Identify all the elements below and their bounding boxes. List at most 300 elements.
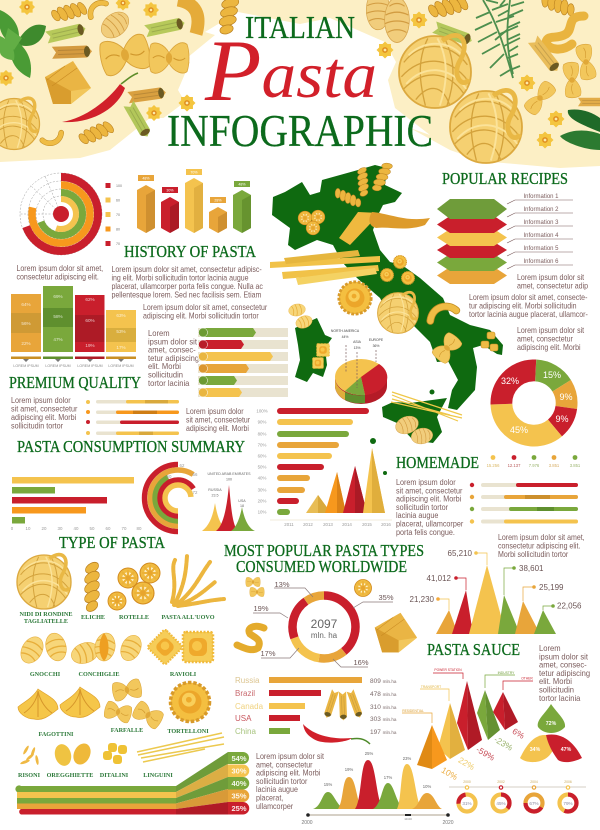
text: premium paragraph <box>11 396 78 431</box>
donut chart: 45% <box>510 425 528 435</box>
progress bars: premium <box>86 400 179 435</box>
text: second paragraph <box>143 303 268 321</box>
text: pasta sauce paragraph: elit. Morbi <box>539 677 572 686</box>
3D pyramid chart: 6% <box>511 726 527 741</box>
timeline with donuts <box>449 780 586 815</box>
bell area chart: 10% <box>423 784 431 789</box>
text: mountain chart note: consectetur adipiscing elit. <box>498 541 580 551</box>
text: recipes note <box>517 273 588 291</box>
ring chart: 2097 mln. ha: 19% <box>253 604 269 613</box>
bar and triangle chart: yearly: 40% <box>258 476 266 480</box>
timeline with donuts: 2006 <box>564 780 572 784</box>
bar and triangle chart: yearly: 100% <box>256 408 268 414</box>
orecchiette: OREGGHIETTE <box>47 772 93 779</box>
petal chart: 47% <box>561 747 572 753</box>
bar and triangle chart: yearly: 70% <box>258 442 266 448</box>
text: premium side note: sit amet, consectetur <box>186 415 251 425</box>
pasta all'uovo <box>161 556 224 621</box>
radial chart legend: 80 <box>116 228 120 232</box>
bell area chart: 17% <box>384 775 392 780</box>
ditalini <box>100 743 129 779</box>
text: donut note <box>517 326 585 352</box>
text: radial note: consectetur adipiscing elit. <box>16 272 99 282</box>
text: recipes note: amet, consectetur adip <box>517 281 588 291</box>
stacked column chart: 63% <box>116 313 126 318</box>
horizontal bars <box>277 408 369 515</box>
stacked column chart: 62% <box>85 297 95 302</box>
donut chart: 32% <box>501 376 519 386</box>
stacked column chart: LOREM IPSUM <box>108 364 134 368</box>
text: premium paragraph: Lorem ipsum dolor <box>11 396 71 405</box>
stacked column chart: 58% <box>53 314 63 319</box>
icon: mint leaves <box>0 10 46 78</box>
conchiglie <box>68 631 145 678</box>
horizontal bar chart: consumption: 70 <box>122 526 127 531</box>
text: homemade paragraph: placerat, ullamcorper <box>396 519 464 529</box>
half ring chart <box>144 463 212 532</box>
peak chart: countries: USA <box>238 499 246 503</box>
hexagon chart information labels: Information 4 <box>523 233 559 239</box>
3D pyramid chart: 10% <box>440 765 460 782</box>
country bar chart: Canada <box>235 702 264 711</box>
mountain chart: 22,056 <box>557 602 582 610</box>
text: homemade paragraph: sit amet, consectetur <box>396 486 463 495</box>
area chart timeline <box>301 813 454 826</box>
3D pyramid chart: POWER STATION <box>434 668 462 672</box>
text: recipes paragraph <box>469 293 588 319</box>
text: narrow paragraph: sollicitudin <box>148 370 183 380</box>
bar and triangle chart: yearly: 10% <box>258 510 266 514</box>
stacked column chart: LOREM IPSUM <box>13 364 39 368</box>
ditalini: DITALINI <box>100 772 129 779</box>
country bar chart: USA <box>235 714 252 723</box>
peak chart: countries: 18 <box>240 504 244 508</box>
bar and triangle chart: yearly: 50% <box>258 464 266 470</box>
heading: most popular pasta types <box>224 541 424 576</box>
nidi di rondine: TAGLIATELLE <box>24 618 68 625</box>
bell area chart: 25% <box>365 751 373 756</box>
country bar chart <box>235 676 397 736</box>
donut chart <box>488 357 580 449</box>
text: homemade paragraph: porta felis congue. <box>396 527 455 537</box>
stacked column chart: 53% <box>116 329 126 334</box>
text: narrow paragraph: Lorem <box>148 329 170 338</box>
3D pie chart on Sardinia: EUROPE <box>369 338 384 342</box>
risoni <box>18 745 41 779</box>
Sicily <box>382 398 447 443</box>
text: premium side note <box>186 407 251 433</box>
text: history paragraph: Lorem ipsum dolor sit amet, consectetur adipisc- <box>112 265 262 274</box>
eliche <box>81 560 105 621</box>
radial chart legend: 100 <box>116 184 122 188</box>
stacked column chart: 19% <box>85 343 95 348</box>
horizontal bar chart: consumption: 0 <box>11 526 14 531</box>
3D pyramid chart: 22% <box>457 755 477 772</box>
text: recipes paragraph: tortor lacinia augue placerat, ullamcor- <box>469 310 588 319</box>
bar and triangle chart: yearly: 2011 <box>284 522 294 527</box>
area chart timeline: 10.00 <box>404 817 412 821</box>
ribbon percentage chart: 30% <box>231 766 247 776</box>
text: narrow paragraph: amet, consec- <box>148 345 196 355</box>
half ring chart: 72 <box>193 490 198 495</box>
tortelloni: TORTELLONI <box>167 728 209 735</box>
ring chart: 2097 mln. ha: 35% <box>378 593 394 602</box>
country bar chart: 197 mln.ha <box>370 729 397 736</box>
bar and triangle chart: yearly <box>256 408 392 527</box>
rotelle <box>108 563 160 621</box>
text: history paragraph: ing elit. Morbi sollicitudin tortor lacinia augue <box>112 273 249 283</box>
bell area chart: 23% <box>403 756 411 761</box>
ribbon percentage chart: 35% <box>231 792 247 800</box>
3D pyramid chart <box>402 668 533 782</box>
timeline with donuts: 79% <box>563 801 573 806</box>
horizontal bar chart: consumption: 40 <box>74 526 79 531</box>
progress bars: homemade <box>470 483 578 524</box>
3D pyramid chart: INDUSTRY <box>498 671 515 675</box>
ring chart: 2097 mln. ha: 2097 <box>311 617 338 631</box>
horizontal bar chart: consumption: 50 <box>90 526 95 531</box>
text: narrow paragraph: tetur adipiscing <box>148 354 199 363</box>
donut legend: 3.851 <box>549 463 560 468</box>
mountain chart: 25,199 <box>539 583 564 592</box>
3D column chart: 48% <box>142 176 150 180</box>
petal chart <box>520 704 582 762</box>
farfalle <box>103 678 165 734</box>
radial chart legend: 70 <box>116 213 120 217</box>
mainland <box>272 165 503 410</box>
mountain chart: 38,601 <box>519 564 544 573</box>
text: ribbon paragraph: adipiscing elit. Morbi <box>256 768 321 778</box>
half ring chart: 62 <box>180 463 185 468</box>
horizontal bar chart: consumption: 10 <box>26 526 31 531</box>
triangles <box>306 448 385 513</box>
petal chart: 72% <box>546 721 557 727</box>
stacked column chart: 64% <box>21 302 31 307</box>
3D pyramid chart: TRANSPORT <box>421 685 441 689</box>
text: pasta sauce paragraph: ipsum dolor sit <box>539 652 589 661</box>
horizontal bar chart: consumption: 80 <box>137 526 142 531</box>
3D pyramid chart: OTHER <box>521 676 533 680</box>
stacked column chart: LOREM IPSUM <box>77 364 103 368</box>
heading: pasta sauce: PASTA SAUCE <box>427 640 520 659</box>
timeline with donuts: 2002 <box>497 780 505 784</box>
text: recipes paragraph: Lorem ipsum dolor sit amet, consecte- <box>469 293 588 302</box>
ribbon percentage chart: 54% <box>231 754 247 763</box>
stacked column chart: 56% <box>21 321 31 326</box>
3D column chart: 70% <box>190 170 198 174</box>
text: pasta sauce paragraph <box>539 644 590 703</box>
fagottini: FAGOTTINI <box>39 731 74 738</box>
donut chart: 9% <box>555 414 569 424</box>
radial chart legend: 70 <box>116 242 120 246</box>
bar and triangle chart: yearly: 2014 <box>342 522 352 527</box>
timeline with donuts: 67% <box>529 801 539 806</box>
text: radial note <box>16 264 103 282</box>
bar and triangle chart: yearly: 60% <box>258 454 266 458</box>
title line: Italian: ITALIAN <box>245 9 355 45</box>
donut legend: 15.256 <box>487 463 500 468</box>
text: homemade paragraph: sollicitudin tortor <box>396 503 448 512</box>
text: pasta sauce paragraph: sollicitudin <box>539 685 574 695</box>
icon: wavy macaroni <box>237 626 264 650</box>
linguini: LINGUINI <box>143 772 173 779</box>
text: history paragraph: pellentesque lorem. Sed nec facilisis sem. Etiam <box>112 290 261 300</box>
timeline with donuts: 2000 <box>463 780 471 784</box>
icon: ditalini <box>481 332 498 351</box>
ribbon percentage chart: 40% <box>231 779 247 788</box>
bar and triangle chart: yearly: 2016 <box>381 522 391 527</box>
heading: pasta consumption summary: PASTA CONSUMPTION SUMMARY <box>17 437 245 456</box>
title line: Pasta: P <box>205 23 259 120</box>
horizontal bar chart: consumption: 60 <box>106 526 111 531</box>
text: recipes note: Lorem ipsum dolor sit <box>517 273 585 282</box>
title line: Pasta: asta <box>261 39 377 112</box>
heading: most popular pasta types: MOST POPULAR PASTA TYPES <box>224 541 424 560</box>
icon: spaghetti on Sicily <box>391 392 462 421</box>
horizontal bar chart: consumption: 20 <box>42 526 47 531</box>
risoni: RISONI <box>18 772 41 779</box>
text: premium side note: adipiscing elit. Morbi <box>186 424 249 433</box>
bar and triangle chart: yearly: 2013 <box>323 522 333 527</box>
text: recipes paragraph: tur adipiscing elit. Morbi sollicitudin <box>469 301 577 311</box>
3D pie chart on Sardinia: 36% <box>373 344 379 348</box>
donut legend <box>487 455 581 468</box>
peak chart: countries: RUSSIA <box>208 488 222 492</box>
text: second paragraph: adipiscing elit. Morbi sollicitudin tortor <box>143 311 259 321</box>
3D column chart <box>137 169 251 233</box>
text: ribbon paragraph: sollicitudin tortor <box>256 777 308 786</box>
ravioli: RAVIOLI <box>170 671 197 678</box>
bar and triangle chart: yearly: 80% <box>258 432 266 436</box>
bar and triangle chart: yearly: 30% <box>258 488 266 492</box>
donut chart: 9% <box>559 392 573 402</box>
orecchiette <box>47 741 94 779</box>
3D pie chart on Sardinia: 13% <box>354 346 360 350</box>
text: pasta sauce paragraph: tetur adipiscing <box>539 669 590 678</box>
3D pie chart on Sardinia: NORTH AMERICA <box>331 329 360 333</box>
timeline with donuts: 2004 <box>530 780 538 784</box>
pasta all'uovo: PASTA ALL'UOVO <box>161 614 215 621</box>
3D pie chart on Sardinia: 44% <box>342 335 348 339</box>
icon: large macaroni <box>178 0 198 34</box>
gnocchi: GNOCCHI <box>30 671 61 678</box>
bell area chart: 19% <box>345 767 353 772</box>
text: narrow paragraph: ipsum dolor sit <box>148 337 198 346</box>
country bar chart: 310 mln.ha <box>370 704 397 711</box>
heading: homemade: HOMEMADE <box>396 453 479 472</box>
text: ribbon paragraph: amet, consectetur <box>256 760 313 769</box>
3D pie chart on Sardinia <box>331 329 387 404</box>
heading: type of pasta: TYPE OF PASTA <box>59 533 166 552</box>
Sardinia <box>295 318 332 382</box>
country bar chart: 303 mln.ha <box>370 716 397 723</box>
text: donut note: amet, consectetur <box>517 334 573 344</box>
stacked column chart: LOREM IPSUM <box>45 364 71 368</box>
3D column chart: 48% <box>238 182 246 186</box>
donut legend: 12.137 <box>508 463 521 468</box>
text: ribbon paragraph: lacinia augue <box>256 785 298 794</box>
country bar chart: 809 mln.ha <box>370 678 397 685</box>
icon: chili pepper <box>62 84 125 122</box>
header pasta illustrations left <box>0 0 242 149</box>
pasta types gallery <box>16 555 224 779</box>
bar and triangle chart: yearly: 90% <box>258 420 266 424</box>
text: donut note: adipiscing elit. Morbi <box>517 343 581 352</box>
ring chart: 2097 mln. ha <box>253 580 394 671</box>
header background <box>0 0 600 168</box>
text: ribbon paragraph: ullamcorper <box>256 801 294 811</box>
3D pyramid chart: -59% <box>474 744 497 763</box>
horizontal bar chart: consumption: 30 <box>58 526 63 531</box>
bar and triangle chart: yearly: 20% <box>258 498 266 504</box>
area chart timeline: 2020 <box>442 820 454 826</box>
half ring chart: 56 <box>193 472 198 477</box>
text: premium paragraph: sit amet, consectetur <box>11 404 78 414</box>
text: history paragraph: placerat, ullamcorper porta felis congue. Nulla ac <box>112 282 263 291</box>
hexagon chart information labels: Information 3 <box>523 220 559 226</box>
nidi di rondine: NIDI DI RONDINE <box>20 611 72 618</box>
text: narrow paragraph: elit. Morbi <box>148 362 181 371</box>
mountain chart: 21,230 <box>410 595 435 604</box>
arrow bar chart <box>198 328 288 397</box>
stacked column chart: 47% <box>53 337 63 342</box>
heading: history of pasta: HISTORY OF PASTA <box>124 242 257 261</box>
icon: chili <box>303 724 352 743</box>
gnocchi <box>16 631 69 678</box>
mountain chart <box>410 549 582 634</box>
nidi di rondine <box>17 555 72 625</box>
text: premium paragraph: sollicitudin tortor <box>11 421 63 431</box>
text: homemade paragraph: Lorem ipsum dolor <box>396 478 456 487</box>
text: ribbon paragraph <box>256 752 325 811</box>
icon: pappardelle ribbon <box>339 212 430 245</box>
linguini <box>137 733 224 779</box>
radial chart legend <box>106 183 122 246</box>
peak chart: countries: 100 <box>226 478 232 482</box>
3D column chart: 28% <box>214 198 222 202</box>
eliche: ELICHE <box>81 614 105 621</box>
text: mountain chart note: Lorem ipsum dolor sit amet, <box>498 533 585 542</box>
heading: popular recipes: POPULAR RECIPES <box>442 169 568 188</box>
bar and triangle chart: yearly: 2012 <box>303 522 313 527</box>
text: pasta sauce paragraph: tortor lacinia <box>539 694 581 703</box>
ring chart: 2097 mln. ha: 16% <box>353 658 369 667</box>
peak chart: countries: 23.5 <box>212 494 218 498</box>
text: homemade paragraph: adipiscing elit. Morbi <box>396 494 462 504</box>
hexagon chart information labels: Information 5 <box>523 246 559 252</box>
mountain chart: 41,012 <box>427 574 452 583</box>
ring chart pasta decoration <box>237 577 417 652</box>
3D pyramid chart: -23% <box>492 734 515 753</box>
text: radial note: Lorem ipsum dolor sit amet, <box>16 264 103 273</box>
ribbon percentage chart <box>15 752 249 814</box>
title line: Infographic: INFOGRAPHIC <box>167 106 433 156</box>
bell area chart <box>313 751 442 809</box>
peak chart: countries: UNITED ARAB EMIRATES <box>207 472 251 476</box>
text: ribbon paragraph: placerat, <box>256 793 283 803</box>
text: mountain chart note <box>498 533 585 559</box>
text: ribbon paragraph: Lorem ipsum dolor sit <box>256 752 325 761</box>
text: narrow paragraph: tortor lacinia <box>148 379 190 388</box>
header pasta illustrations right <box>366 0 600 163</box>
country bar chart: Brazil <box>235 689 255 698</box>
peak chart: countries <box>202 472 255 531</box>
half ring chart: 60 <box>167 474 172 479</box>
heading: most popular pasta types: CONSUMED WORLDWIDE <box>236 557 407 576</box>
ring chart: 2097 mln. ha: 13% <box>274 580 290 589</box>
ring chart: 2097 mln. ha: mln. ha <box>311 631 338 640</box>
donut legend: 7.976 <box>529 463 540 468</box>
heading: premium quality: PREMIUM QUALITY <box>9 373 141 392</box>
ravioli <box>147 629 213 678</box>
text: homemade paragraph: lacinia augue <box>396 511 438 520</box>
horizontal bar chart: consumption <box>11 477 142 531</box>
stacked column chart <box>11 286 136 368</box>
radial chart legend: 60 <box>116 198 120 202</box>
fagottini <box>18 687 100 738</box>
3D pyramid chart: RESIDENTIAL <box>402 709 424 713</box>
farfalle: FARFALLE <box>111 727 143 734</box>
hexagon chart information labels: Information 6 <box>523 259 559 265</box>
stacked column chart: 69% <box>53 294 63 299</box>
text: donut note: Lorem ipsum dolor sit <box>517 326 585 335</box>
rotelle: ROTELLE <box>119 614 149 621</box>
radial chart <box>20 173 102 255</box>
stacked column chart: 60% <box>85 318 95 323</box>
layered hexagon chart <box>437 199 507 284</box>
pasta on map <box>270 159 498 446</box>
3D column chart: 30% <box>166 188 174 192</box>
text: premium paragraph: adipiscing elit. Morbi <box>11 413 77 422</box>
donut legend: 3.851 <box>570 463 581 468</box>
3D pie chart on Sardinia: ASIA <box>353 340 362 344</box>
stacked column chart: 17% <box>116 345 126 350</box>
text: narrow paragraph <box>148 329 199 388</box>
text: history paragraph <box>112 265 263 300</box>
text: premium side note: Lorem ipsum dolor <box>186 407 244 416</box>
text: pasta sauce paragraph: amet, consec- <box>539 660 587 670</box>
small islands <box>370 390 434 475</box>
stacked column chart: 22% <box>21 341 31 346</box>
penne and chili decoration <box>303 689 370 744</box>
icon: wavy macaroni <box>546 16 584 49</box>
text: homemade paragraph <box>396 478 464 537</box>
timeline with donuts: 31% <box>462 801 472 806</box>
bell area chart: 15% <box>324 782 332 787</box>
ring chart: 2097 mln. ha: 17% <box>260 649 276 658</box>
conchiglie: CONCHIGLIE <box>79 671 119 678</box>
text: pasta sauce paragraph: Lorem <box>539 644 561 653</box>
ribbon percentage chart: 25% <box>231 804 247 813</box>
title <box>167 9 433 156</box>
country bar chart: Russia <box>235 676 260 685</box>
country bar chart: China <box>235 727 256 736</box>
hexagon chart information labels: Information 2 <box>523 207 559 213</box>
mountain chart: 65,210 <box>448 549 473 558</box>
tortelloni <box>167 682 210 735</box>
bar and triangle chart: yearly: 2015 <box>362 522 372 527</box>
petal chart: 34% <box>530 747 541 753</box>
timeline with donuts: 45% <box>496 801 506 806</box>
donut chart: 15% <box>543 370 561 380</box>
icon: rosemary <box>475 0 524 78</box>
text: second paragraph: Lorem ipsum dolor sit amet, consectetur <box>143 303 268 312</box>
text: mountain chart note: Morbi sollicitudin tortor <box>498 550 569 559</box>
hexagon chart information labels <box>507 194 573 269</box>
icon: spaghetti bundle <box>270 250 380 285</box>
map of Italy <box>272 165 503 475</box>
country bar chart: 478 mln.ha <box>370 691 397 698</box>
